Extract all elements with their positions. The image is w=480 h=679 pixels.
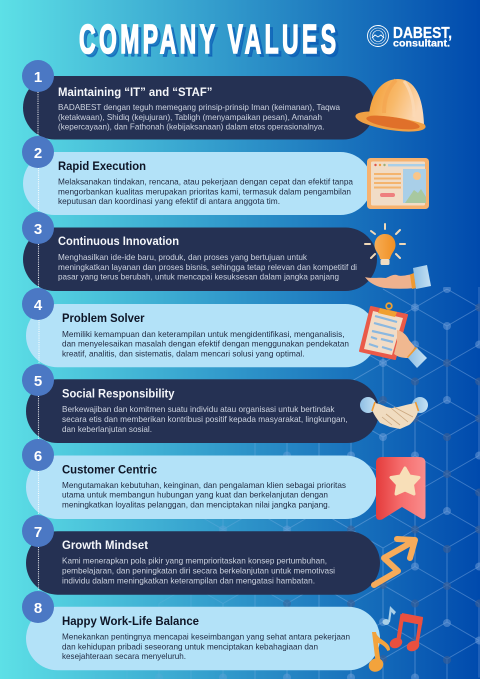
- background hexagon network: [155, 287, 480, 679]
- panel 1: Maintaining IT and STAF: [22, 60, 427, 140]
- icon: zigzag growth arrow: [374, 539, 415, 585]
- number badge 8: 8: [34, 600, 42, 617]
- body text: kreatif, analitis, dan sistematis, dalam mencari solusi yang optimal.: [62, 349, 304, 358]
- number badge 5: 5: [34, 373, 42, 390]
- panel 8: Happy Work-Life Balance: [22, 591, 423, 674]
- card background: [26, 304, 377, 367]
- panel 3: Continuous Innovation: [22, 212, 431, 291]
- body text: pembelajaran, dan peningkatan diri secara berkelanjutan untuk memotivasi: [62, 566, 335, 575]
- panel 7: Growth Mindset: [22, 515, 415, 595]
- body text: Melaksanakan tindakan, rencana, atau pekerjaan dengan cepat dan efektif tanpa: [58, 178, 353, 187]
- dotted connector: [38, 396, 40, 440]
- body text: utama untuk membangun hubungan yang kuat dan berkelanjutan dengan: [62, 491, 328, 500]
- card background: [23, 228, 377, 291]
- logo wordmark: [393, 25, 452, 50]
- heading: Customer Centric: [62, 462, 157, 476]
- icon: hard hat: [354, 79, 427, 135]
- body text: [58, 253, 357, 282]
- card background: [26, 379, 379, 443]
- number badge 4: 4: [34, 297, 43, 314]
- body text: [62, 330, 349, 358]
- number badge 7: [22, 515, 54, 547]
- body text: mengorbankan kualitas merupakan prioritas kami, termasuk dalam pengambilan: [58, 187, 351, 196]
- card background: [23, 152, 372, 215]
- body text: dan keberlanjutan sosial.: [62, 425, 152, 434]
- body text: [58, 178, 353, 206]
- number badge 3: [22, 212, 54, 244]
- body text: [62, 481, 346, 510]
- card background: [23, 76, 375, 140]
- body text: Menghasilkan ide-ide baru, produk, dan proses yang bertujuan untuk: [58, 253, 308, 262]
- number badge 7: 7: [34, 524, 42, 541]
- number badge 4: [22, 288, 54, 320]
- heading: Continuous Innovation: [58, 234, 179, 248]
- title: COMPANY VALUES: [79, 17, 336, 63]
- body text: [62, 557, 335, 585]
- dotted connector: [38, 471, 40, 516]
- title: COMPANY VALUES: [82, 20, 339, 66]
- body text: dan menyelesaikan masalah dengan efektif dengan menggunakan pendekatan: [62, 340, 349, 349]
- logo wordmark: consultant.: [393, 38, 450, 50]
- body text: keputusan dan koordinasi yang efektif di antara anggota tim.: [58, 197, 280, 206]
- logo: DABEST consultant: [368, 25, 452, 50]
- number badge 2: 2: [34, 145, 42, 162]
- body text: Berkewajiban dan komitmen suatu individu atau organisasi untuk bertindak: [62, 405, 335, 414]
- dotted connector: [38, 547, 40, 592]
- icon: clipboard in hand: [360, 303, 427, 368]
- icon: music notes: [366, 606, 423, 674]
- dotted connector: [38, 320, 40, 365]
- panel 5: Social Responsibility: [22, 364, 428, 443]
- number badge 6: [22, 439, 54, 471]
- number badge 5: [22, 364, 54, 396]
- dotted connector: [37, 92, 39, 137]
- card background: [26, 607, 380, 670]
- panel 4: Problem Solver: [22, 288, 427, 368]
- body text: [62, 405, 348, 434]
- logo wordmark: DABEST,: [393, 25, 452, 42]
- body text: meningkatkan layanan dan proses bisnis, sehingga tetap relevan dan kompetitif di: [58, 263, 357, 272]
- body text: Menekankan pentingnya mencapai keseimbangan yang sehat antara pekerjaan: [62, 633, 350, 642]
- body text: BADABEST dengan teguh memegang prinsip-prinsip Iman (keimanan), Taqwa: [58, 103, 340, 112]
- body text: (kepercayaan), dan Fathonah (kebijaksanaan) dalam etos operasionalnya.: [58, 122, 324, 132]
- dotted connector: [38, 244, 40, 289]
- body text: Kami menerapkan pola pikir yang memprioritaskan konsep pertumbuhan,: [62, 557, 327, 566]
- body text: (ketakwaan), Shidiq (kejujuran), Tabligh (menyampaikan pesan), Amanah: [58, 113, 322, 122]
- number badge 2: [22, 136, 54, 168]
- body text: pasar yang terus berubah, untuk mencapai kesuksesan dalam jangka panjang: [58, 272, 339, 282]
- icon: light bulb over hand: [365, 224, 431, 289]
- icon: star bookmark: [376, 457, 426, 520]
- number badge 1: 1: [34, 69, 42, 86]
- body text: [58, 103, 340, 132]
- number badge 8: [22, 591, 54, 623]
- number badge 3: 3: [34, 221, 42, 238]
- body text: kesejahteraan secara menyeluruh.: [62, 652, 186, 661]
- body text: individu dalam meningkatkan keterampilan dan mengatasi hambatan.: [62, 576, 315, 585]
- heading: Social Responsibility: [62, 387, 175, 401]
- body text: Mengutamakan kebutuhan, keinginan, dan pengalaman klien sebagai prioritas: [62, 481, 346, 490]
- heading: Rapid Execution: [58, 159, 146, 173]
- card background: [26, 456, 377, 519]
- body text: Memiliki kemampuan dan keterampilan untuk mengidentifikasi, menganalisis,: [62, 330, 344, 339]
- icon: handshake: [360, 397, 428, 429]
- body text: [62, 633, 350, 661]
- number badge 1: [22, 60, 54, 92]
- heading: Happy Work-Life Balance: [62, 614, 199, 628]
- dotted connector: [38, 168, 40, 212]
- body text: secara etis dan memberikan kontribusi positif kepada masyarakat, lingkungan,: [62, 415, 348, 424]
- heading: Growth Mindset: [62, 538, 148, 552]
- panel 6: Customer Centric: [22, 439, 426, 520]
- card background: [26, 531, 380, 595]
- icon: browser window: [367, 158, 429, 209]
- heading: Maintaining “IT” and “STAF”: [58, 85, 212, 99]
- heading: Problem Solver: [62, 311, 145, 325]
- body text: dan kehidupan pribadi seseorang untuk menciptakan kebahagiaan dan: [62, 642, 318, 651]
- body text: meningkatkan loyalitas pelanggan, dan menciptakan nilai jangka panjang.: [62, 500, 330, 510]
- icon: logo emblem: [368, 26, 388, 46]
- panel 2: Rapid Execution: [22, 136, 429, 215]
- number badge 6: 6: [34, 448, 42, 465]
